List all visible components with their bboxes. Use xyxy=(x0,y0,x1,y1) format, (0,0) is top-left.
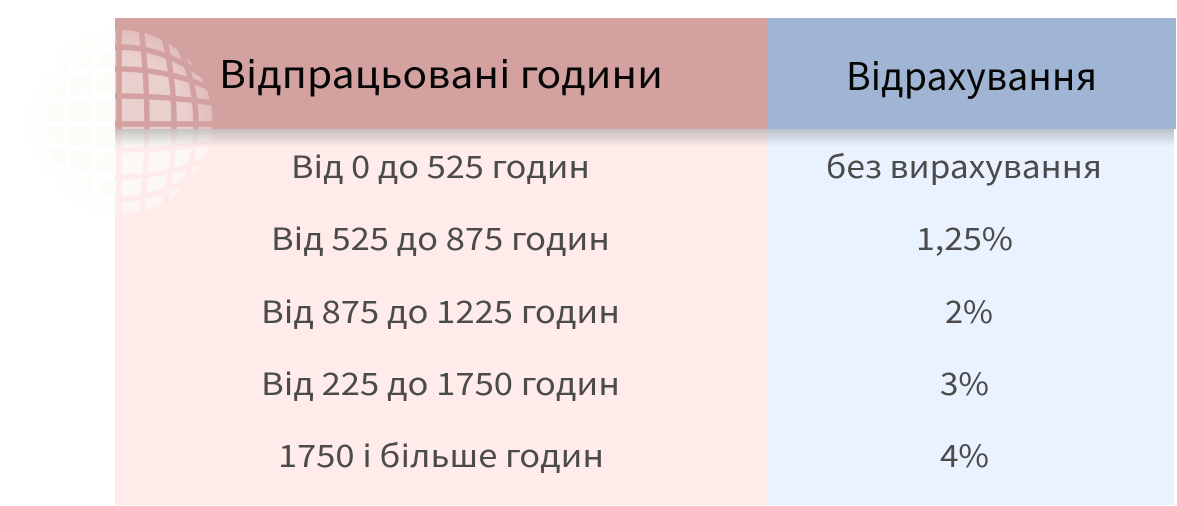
text block: hours ranges: Від 225 до 1750 годин xyxy=(261,359,620,404)
panel: hours column body xyxy=(115,129,768,505)
header shadow xyxy=(115,129,1174,147)
text block: hours ranges: Від 875 до 1225 годин xyxy=(261,287,620,332)
text block: deduction values xyxy=(826,142,1102,476)
text block: deduction values: 2% xyxy=(945,287,993,332)
text block: deduction values: 3% xyxy=(940,359,989,404)
header: hours column background xyxy=(115,18,767,129)
text block: hours ranges: 1750 і більше годин xyxy=(278,431,604,476)
panel: deductions column body xyxy=(768,129,1174,505)
icon: decorative globe xyxy=(115,30,212,214)
heading: deduction: Відрахування xyxy=(846,46,1097,101)
text block: deduction values: 4% xyxy=(940,431,989,476)
text block: hours ranges xyxy=(261,142,620,476)
heading: hours worked: Відпрацьовані години xyxy=(219,44,663,99)
text block: deduction values: без вирахування xyxy=(826,142,1102,187)
text block: hours ranges: Від 0 до 525 годин xyxy=(291,142,590,187)
text block: deduction values: 1,25% xyxy=(916,214,1013,259)
text block: hours ranges: Від 525 до 875 годин xyxy=(271,214,610,259)
header: deductions column background xyxy=(767,18,1176,129)
